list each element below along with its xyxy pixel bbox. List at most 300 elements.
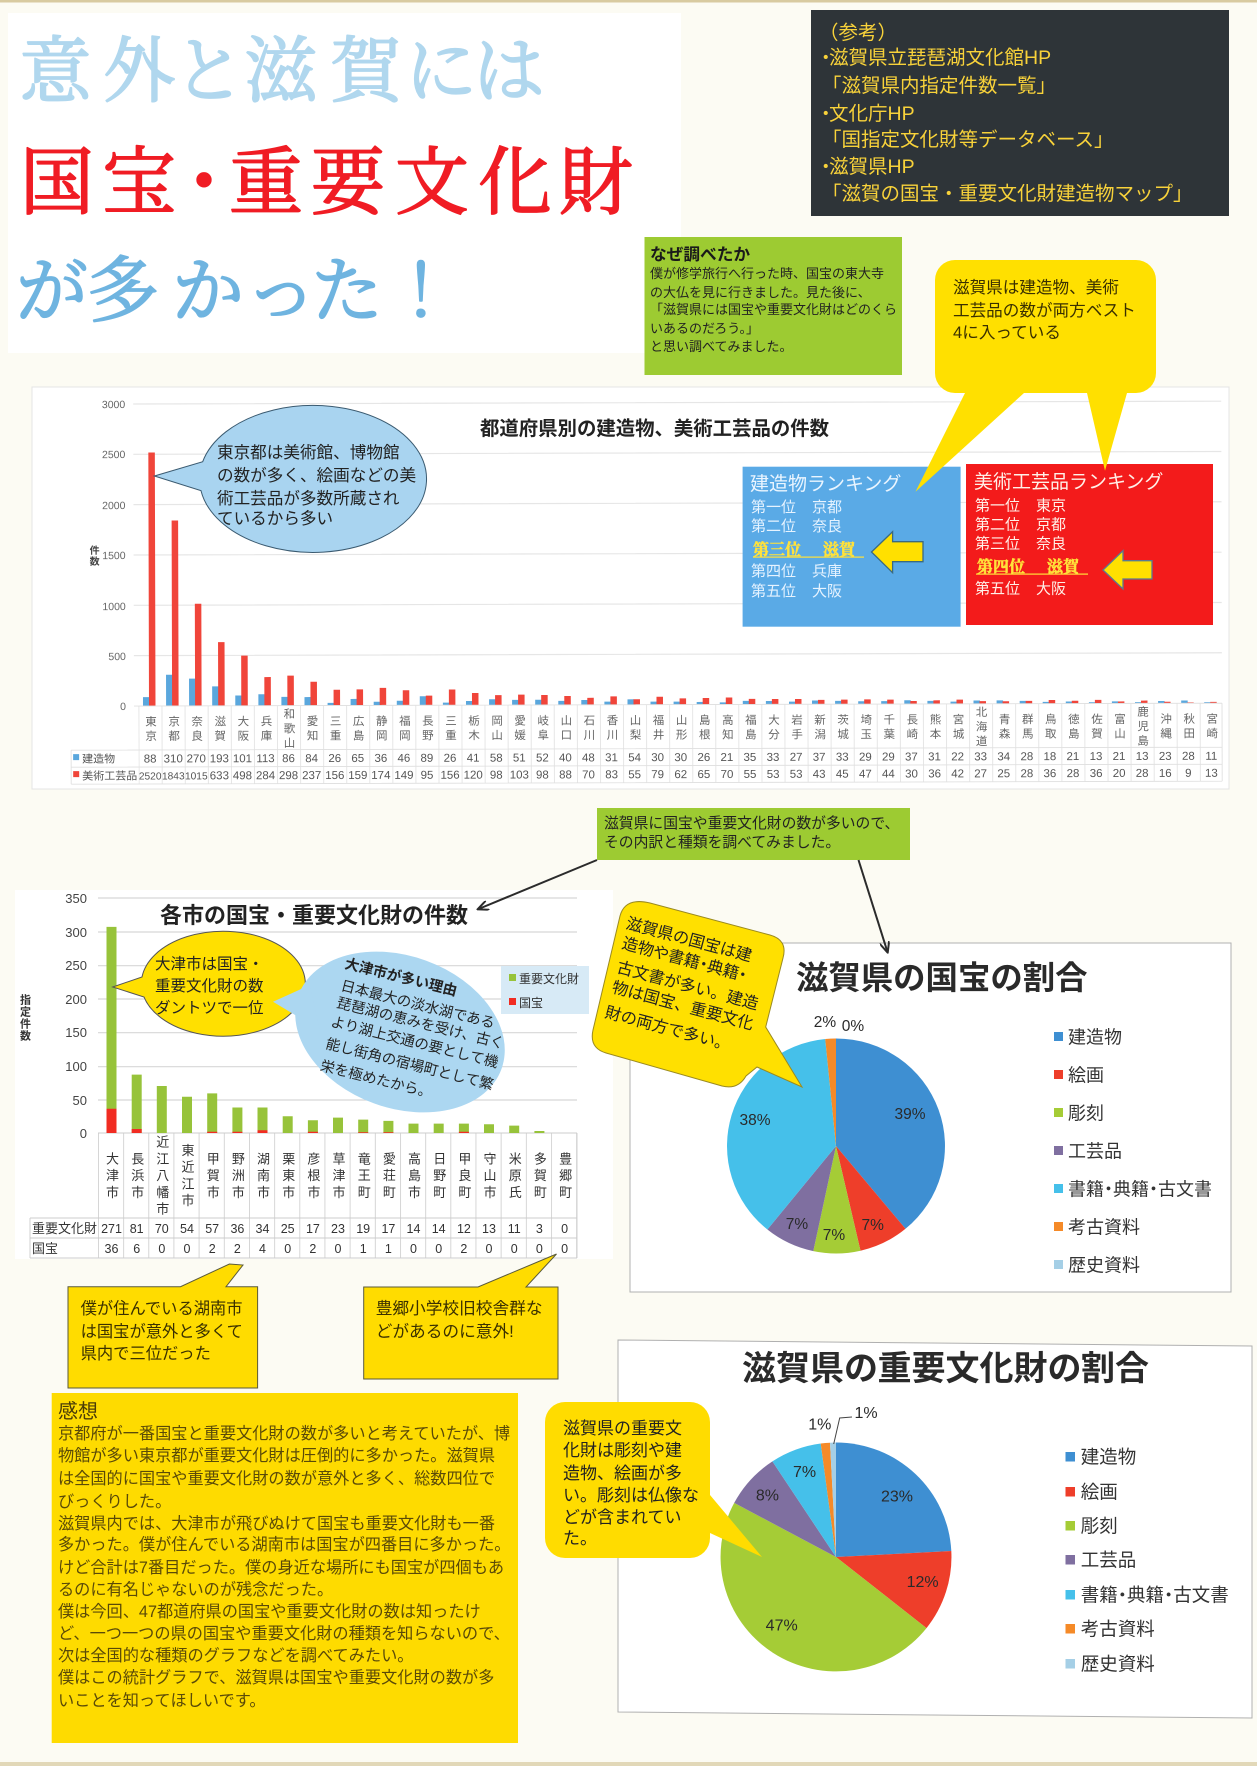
callout: important cultural property note: い。彫刻は仏像な <box>563 1486 699 1505</box>
legend <box>501 966 589 1014</box>
callout: important cultural property note: どが含まれてい <box>563 1508 682 1527</box>
row: buildings: 18 <box>1043 751 1056 763</box>
panel: prefecture chart <box>32 387 1229 789</box>
y axis labels: 0 <box>80 1126 87 1141</box>
row: buildings: 101 <box>233 753 252 765</box>
callout: Otsu first <box>113 931 305 1036</box>
row: national treasures: 2 <box>460 1242 467 1256</box>
title line 1: 意外と滋賀には <box>20 13 545 117</box>
pie chart: 47% <box>766 1618 798 1634</box>
panel: impressions <box>52 1393 518 1743</box>
panel: city chart <box>15 890 613 1259</box>
row: art and crafts: 47 <box>859 769 872 781</box>
row: art and crafts: 1843 <box>162 771 185 782</box>
category labels: 三重 <box>444 715 457 744</box>
category labels: 青森 <box>998 713 1010 742</box>
pie chart: 7% <box>861 1217 884 1234</box>
y axis labels: 200 <box>65 992 87 1007</box>
pie legend: 建造物 <box>1068 1028 1122 1048</box>
row: important cultural properties: 25 <box>281 1222 295 1236</box>
category labels: 滋賀 <box>213 714 226 744</box>
category labels: 宮崎 <box>1205 713 1218 742</box>
y axis labels: 2500 <box>102 449 126 461</box>
row: art and crafts: 42 <box>951 768 964 780</box>
callout: Toyosato town <box>364 1254 558 1379</box>
panel: building ranking: 奈良 <box>812 518 842 535</box>
callout: Toyosato town: どがあるのに意外! <box>376 1322 514 1341</box>
row: art and crafts: 284 <box>256 770 276 782</box>
category labels: 栃木 <box>467 714 480 744</box>
pie legend: 彫刻 <box>1068 1104 1104 1124</box>
city labels: 湖南市 <box>255 1152 270 1202</box>
pie chart: 0% <box>842 1018 864 1035</box>
callout: why Otsu: 日本最大の淡水湖である <box>339 977 497 1032</box>
impressions body: 僕はこの統計グラフで、滋賀県は国宝や重要文化財の数が多 <box>58 1669 494 1687</box>
panel: references: ・ <box>816 156 836 178</box>
row: art and crafts: 98 <box>490 770 503 782</box>
row: art and crafts: 28 <box>1067 768 1079 780</box>
category labels: 長崎 <box>905 713 918 742</box>
row: art and crafts: 83 <box>605 769 618 781</box>
pie legend: 考古資料 <box>1068 1218 1140 1238</box>
impressions body: は全国的に国宝や重要文化財の数が意外と多く、総数四位で <box>58 1470 495 1488</box>
row: art and crafts: 62 <box>674 769 687 781</box>
panel: breakdown note <box>597 808 910 860</box>
row: important cultural properties: 19 <box>356 1222 370 1236</box>
panel: art and crafts ranking: 第五位 <box>975 580 1020 598</box>
category labels: 愛知 <box>306 715 318 744</box>
category labels: 石川 <box>582 714 595 743</box>
row: important cultural properties: 36 <box>230 1222 244 1236</box>
pie chart: 38% <box>739 1112 771 1129</box>
callout: Tokyo: ているから多い <box>217 509 333 528</box>
row: buildings: 30 <box>674 752 687 764</box>
impressions body: 物館が多い東京都が重要文化財は圧倒的に多かった。滋賀県 <box>58 1447 495 1465</box>
city labels: 長浜市 <box>129 1152 144 1202</box>
category labels: 和歌山 <box>282 708 295 751</box>
panel: references: ・ <box>816 47 836 69</box>
category labels: 岐阜 <box>536 714 549 743</box>
row: buildings: 310 <box>164 753 183 765</box>
callout: Konan city <box>68 1264 258 1388</box>
row: buildings: 13 <box>1090 751 1102 763</box>
panel: building ranking: 第二位 <box>751 518 796 535</box>
pie legend: 彫刻 <box>1081 1516 1118 1536</box>
row: art and crafts: 28 <box>1020 768 1033 780</box>
row: buildings: 33 <box>836 752 849 764</box>
panel: art and crafts ranking: 第三位 <box>975 536 1020 552</box>
pie legend: 絵画 <box>1081 1482 1118 1502</box>
row: buildings: 193 <box>210 753 229 765</box>
pie legend: 書籍・典籍・古文書 <box>1081 1584 1229 1606</box>
row: buildings: 13 <box>1136 751 1149 763</box>
row: important cultural properties <box>32 1221 568 1236</box>
callout: Otsu first: 重要文化財の数 <box>155 977 264 995</box>
panel: why we researched: と思い調べてみました。 <box>650 339 792 354</box>
row: art and crafts: 36 <box>928 768 941 780</box>
ranking heading: 美術工芸品ランキング <box>974 471 1163 493</box>
row: art and crafts: 28 <box>1136 768 1149 780</box>
pie legend <box>1054 1028 1212 1276</box>
panel: references <box>811 10 1229 216</box>
row: important cultural properties: 54 <box>180 1222 194 1236</box>
panel: building ranking: 第四位 <box>751 563 796 580</box>
row: buildings: 22 <box>951 751 964 763</box>
row: buildings: 65 <box>351 753 364 765</box>
highlighted rank: Shiga third <box>753 540 864 559</box>
pie title: 滋賀県の重要文化財の割合 <box>742 1350 1149 1388</box>
panel: art and crafts ranking: 京都 <box>1036 516 1066 534</box>
panel: references: 「滋賀の国宝・重要文化財建造物マップ」 <box>822 183 1193 205</box>
row: buildings: 30 <box>651 752 664 764</box>
data table <box>71 703 1223 784</box>
category labels: 鳥取 <box>1044 712 1057 742</box>
panel: references: 滋賀県立琵琶湖文化館HP <box>829 47 1051 69</box>
row: national treasures: 0 <box>435 1242 442 1256</box>
impressions body: 京都府が一番国宝と重要文化財の数が多いと考えていたが、博 <box>58 1425 510 1443</box>
pie title: 滋賀県の国宝の割合 <box>796 960 1088 996</box>
row: national treasures: 0 <box>561 1242 568 1256</box>
row: buildings: 270 <box>187 753 206 765</box>
row: buildings: 26 <box>328 753 341 765</box>
category labels: 新潟 <box>813 714 826 743</box>
callout: Konan city: 僕が住んでいる湖南市 <box>81 1300 243 1318</box>
row: buildings: 33 <box>767 752 779 764</box>
callout: both best four <box>916 260 1156 492</box>
callout: both best four: 滋賀県は建造物、美術 <box>953 278 1119 297</box>
callout: national treasure note: 財の両方で多い。 <box>603 1003 733 1054</box>
city labels: 野洲市 <box>230 1152 245 1202</box>
city labels: 米原氏 <box>507 1152 522 1202</box>
callout: important cultural property note: 化財は彫刻や建 <box>563 1441 682 1460</box>
callout: Konan city: 県内で三位だった <box>81 1345 211 1363</box>
panel: why we researched: いあるのだろう。」 <box>650 321 759 336</box>
row: art and crafts: 159 <box>348 770 367 782</box>
city labels <box>104 1135 572 1219</box>
row: buildings: 26 <box>444 753 456 765</box>
category labels: 宮城 <box>952 713 964 742</box>
row: important cultural properties: 34 <box>256 1222 269 1236</box>
callout: why Otsu: 琵琶湖の恵みを受け、古く <box>335 994 506 1052</box>
y axis labels: 2000 <box>102 500 126 512</box>
gridlines <box>133 401 1222 656</box>
chart title: 都道府県別の建造物、美術工芸品の件数 <box>480 417 830 440</box>
row: buildings: 84 <box>305 753 319 765</box>
red bars: art and crafts <box>148 450 1217 706</box>
row: art and crafts: 9 <box>1185 768 1192 780</box>
row: art and crafts: 156 <box>440 770 460 782</box>
ranking heading: 建造物ランキング <box>750 473 901 495</box>
row: important cultural properties: 12 <box>457 1222 471 1236</box>
y axis labels: 0 <box>120 701 126 713</box>
pie legend: 建造物 <box>1081 1446 1136 1468</box>
city labels: 大津市 <box>104 1152 119 1202</box>
row: buildings: 31 <box>928 751 941 763</box>
category labels: 奈良 <box>190 714 203 744</box>
city labels: 高島市 <box>406 1151 421 1202</box>
row: important cultural properties: 57 <box>205 1222 219 1236</box>
row: national treasures: 0 <box>536 1242 543 1256</box>
pie chart <box>727 1014 945 1253</box>
row: buildings: 88 <box>144 753 157 765</box>
callout: Tokyo: 術工芸品が多数所蔵され <box>217 489 400 508</box>
panel: national treasure pie <box>630 943 1231 1292</box>
city labels: 竜王町 <box>356 1152 371 1202</box>
row: important cultural properties: 11 <box>508 1222 521 1236</box>
arrow <box>1103 551 1152 589</box>
row: national treasures: 2 <box>209 1242 216 1256</box>
row: buildings: 23 <box>1159 751 1172 763</box>
category labels: 埼玉 <box>859 713 872 743</box>
pie chart: 7% <box>823 1227 845 1244</box>
red bars <box>106 1109 469 1133</box>
row: art and crafts: 70 <box>582 769 595 781</box>
row: buildings: 28 <box>1182 751 1195 763</box>
row: buildings: 58 <box>490 753 503 765</box>
chart title: 各市の国宝・重要文化財の件数 <box>160 903 468 928</box>
callout: why Otsu: 栄を極めたから。 <box>319 1057 434 1102</box>
y axis labels: 50 <box>73 1093 87 1108</box>
row: buildings: 46 <box>398 753 410 765</box>
y axis labels: 150 <box>65 1025 87 1040</box>
row: national treasures <box>32 1241 568 1256</box>
panel: building ranking <box>743 467 961 627</box>
city labels: 草津市 <box>330 1152 346 1202</box>
panel: breakdown note: 滋賀県に国宝や重要文化財の数が多いので、 <box>604 814 899 832</box>
row: buildings: 建造物 <box>82 752 115 766</box>
row: art and crafts: 16 <box>1159 768 1172 780</box>
panel: why we researched: の大仏を見に行きました。見た後に、 <box>650 285 871 300</box>
callout: Tokyo: 東京都は美術館、博物館 <box>217 443 400 462</box>
impressions body: びっくりした。 <box>58 1493 171 1511</box>
panel: art and crafts ranking: 第一位 <box>975 498 1020 514</box>
row: buildings: 113 <box>256 753 275 765</box>
callout: national treasure note: 滋賀県の国宝は建 <box>624 914 754 965</box>
row: art and crafts: 美術工芸品 <box>82 769 137 783</box>
row: buildings: 36 <box>374 753 387 765</box>
panel: art and crafts ranking: 東京 <box>1036 498 1066 514</box>
panel: building ranking: 大阪 <box>812 583 842 600</box>
impressions heading: 感想 <box>58 1400 98 1423</box>
callout: Otsu first: ダントツで一位 <box>155 999 264 1017</box>
row: buildings: 21 <box>1067 751 1079 763</box>
row: buildings: 29 <box>882 752 895 764</box>
callout: national treasure note: 造物や書籍・典籍・ <box>620 934 749 985</box>
row: national treasures: 0 <box>184 1242 191 1256</box>
panel: references: （参考） <box>819 22 897 44</box>
row: art and crafts: 20 <box>1113 768 1125 780</box>
highlighted rank: Shiga fourth: 第四位 <box>977 557 1025 576</box>
y axis labels <box>65 891 87 1141</box>
row: buildings: 27 <box>790 752 803 764</box>
pie legend: 歴史資料 <box>1068 1256 1140 1276</box>
y axis title: 指定件数 <box>18 993 31 1042</box>
row: art and crafts: 298 <box>279 770 298 782</box>
row: buildings: 28 <box>1020 751 1033 763</box>
row: national treasures: 1 <box>360 1242 367 1256</box>
row: national treasures: 国宝 <box>32 1241 58 1256</box>
row: buildings: 52 <box>536 752 549 764</box>
row: buildings: 26 <box>697 752 710 764</box>
row: important cultural properties: 17 <box>381 1222 395 1236</box>
highlighted rank: Shiga third: 滋賀 <box>823 540 857 559</box>
row: art and crafts: 237 <box>302 770 321 782</box>
category labels: 徳島 <box>1067 712 1080 742</box>
y axis labels: 300 <box>65 925 87 940</box>
row: art and crafts: 2520 <box>139 771 162 783</box>
row: art and crafts: 88 <box>559 769 572 781</box>
category labels: 茨城 <box>836 714 849 743</box>
callout: Otsu first: 大津市は国宝・ <box>155 955 264 973</box>
row: art and crafts: 25 <box>997 768 1010 780</box>
row: art and crafts: 95 <box>421 770 433 782</box>
row: art and crafts: 156 <box>325 770 344 782</box>
y axis labels: 1000 <box>102 601 126 613</box>
row: buildings: 21 <box>1113 751 1125 763</box>
arrow: to city chart <box>478 860 597 909</box>
panel: building ranking: 京都 <box>812 499 842 516</box>
row: buildings: 21 <box>721 752 733 764</box>
row: national treasures: 0 <box>284 1242 291 1256</box>
row: buildings: 37 <box>905 751 918 763</box>
category labels: 福島 <box>744 713 757 743</box>
row: important cultural properties: 14 <box>432 1222 446 1236</box>
y axis labels: 500 <box>108 651 126 663</box>
row: buildings: 86 <box>282 753 295 765</box>
row: national treasures: 2 <box>234 1242 241 1256</box>
city labels: 東近江市 <box>180 1143 194 1210</box>
city labels: 彦根市 <box>305 1152 320 1202</box>
callout: Tokyo <box>154 405 427 552</box>
callout: why Otsu <box>273 924 527 1140</box>
pie chart: 39% <box>894 1106 926 1123</box>
pie legend: 絵画 <box>1068 1066 1104 1086</box>
y axis labels: 350 <box>65 891 87 906</box>
category labels: 富山 <box>1113 713 1126 742</box>
row: art and crafts: 13 <box>1205 768 1218 780</box>
pie legend: 工芸品 <box>1068 1142 1122 1162</box>
callout: national treasure note: 物は国宝、重要文化 <box>610 978 755 1034</box>
title line 3: が多かった！ <box>16 233 457 337</box>
row: art and crafts: 53 <box>767 769 779 781</box>
callout: Tokyo: の数が多く、絵画などの美 <box>217 466 417 485</box>
impressions body: ど、一つ一つの県の国宝や重要文化財の種類を知らないので、 <box>58 1625 510 1643</box>
category labels: 東京 <box>144 715 157 744</box>
city labels: 近江八幡市 <box>154 1135 169 1219</box>
y axis labels: 3000 <box>102 399 125 411</box>
row: art and crafts: 174 <box>371 770 391 782</box>
category labels: 大阪 <box>236 714 249 744</box>
row: art and crafts: 70 <box>721 769 733 781</box>
callout: important cultural property note: 滋賀県の重要文 <box>563 1419 682 1438</box>
city labels: 日野町 <box>431 1152 446 1202</box>
row: buildings: 89 <box>421 753 433 765</box>
row: national treasures: 0 <box>511 1242 518 1256</box>
panel: building ranking: 第一位 <box>751 499 796 516</box>
row: buildings: 29 <box>859 752 872 764</box>
row: important cultural properties: 81 <box>130 1222 144 1236</box>
category labels: 山梨 <box>629 714 641 743</box>
callout: Toyosato town: 豊郷小学校旧校舎群な <box>376 1299 543 1318</box>
category labels: 京都 <box>167 715 180 744</box>
panel: art and crafts ranking: 第二位 <box>975 516 1020 534</box>
category labels: 佐賀 <box>1090 712 1103 742</box>
category labels: 北海道 <box>975 706 987 750</box>
row: important cultural properties: 0 <box>561 1222 568 1236</box>
category labels: 岡山 <box>490 715 502 744</box>
row: art and crafts: 30 <box>905 768 918 780</box>
callout: important cultural property note: 造物、絵画が多 <box>563 1464 682 1483</box>
y axis labels <box>102 399 126 713</box>
legend: 重要文化財 <box>519 971 579 986</box>
row: art and crafts: 43 <box>813 769 826 781</box>
pie chart: 8% <box>756 1488 779 1504</box>
pie legend: 歴史資料 <box>1081 1654 1155 1674</box>
arrow <box>872 532 923 573</box>
pie chart <box>721 1405 951 1671</box>
category labels: 三重 <box>329 715 341 744</box>
row: art and crafts: 1015 <box>185 771 208 782</box>
row: important cultural properties: 17 <box>306 1222 320 1236</box>
arrow: to treasure pie <box>858 860 887 952</box>
callout: national treasure note: 古文書が多い。建造 <box>615 958 760 1014</box>
pie chart: 12% <box>907 1574 939 1591</box>
panel: references: 「国指定文化財等データベース」 <box>822 129 1114 151</box>
category labels: 山口 <box>559 714 571 743</box>
city labels: 愛荘町 <box>381 1152 396 1202</box>
callout: national treasure note <box>592 902 802 1087</box>
category labels: 高知 <box>721 714 734 743</box>
category labels: 大分 <box>767 713 780 743</box>
row: important cultural properties: 13 <box>482 1222 496 1236</box>
panel: art and crafts ranking: 奈良 <box>1036 536 1066 552</box>
city labels: 栗東市 <box>280 1152 295 1202</box>
row: art and crafts: 53 <box>790 769 803 781</box>
callout: important cultural property note: た。 <box>563 1529 597 1548</box>
callout: why Otsu: 大津市が多い理由 <box>343 954 459 1000</box>
row: art and crafts: 98 <box>536 769 549 781</box>
row: art and crafts <box>73 766 1218 783</box>
row: art and crafts: 55 <box>628 769 641 781</box>
row: buildings <box>73 749 1217 766</box>
category labels: 千葉 <box>882 714 895 743</box>
highlighted rank: Shiga fourth <box>976 557 1088 576</box>
callout: why Otsu: 能し街角の宿場町として繁 <box>324 1035 495 1094</box>
row: buildings: 41 <box>467 753 480 765</box>
row: art and crafts: 633 <box>210 770 229 782</box>
category labels: 長野 <box>421 715 434 744</box>
category labels <box>144 705 1218 752</box>
row: national treasures: 2 <box>309 1242 316 1256</box>
pie chart: 1% <box>854 1405 878 1422</box>
pie chart: 7% <box>786 1216 808 1233</box>
category labels: 群馬 <box>1021 712 1034 742</box>
y axis labels: 100 <box>65 1059 87 1074</box>
category labels: 兵庫 <box>259 715 272 744</box>
panel: references: ・ <box>816 103 836 125</box>
impressions body <box>58 1425 510 1710</box>
row: buildings: 11 <box>1205 751 1217 763</box>
category labels: 島根 <box>698 713 711 743</box>
y axis title: 件数 <box>87 544 99 567</box>
row: art and crafts: 103 <box>510 769 529 782</box>
row: art and crafts: 36 <box>1043 768 1056 780</box>
category labels: 福井 <box>652 713 664 743</box>
row: important cultural properties: 3 <box>536 1222 543 1236</box>
row: art and crafts: 149 <box>394 770 414 782</box>
impressions body: るのに有名じゃないのが残念だった。 <box>58 1581 333 1599</box>
row: art and crafts: 498 <box>233 770 252 782</box>
